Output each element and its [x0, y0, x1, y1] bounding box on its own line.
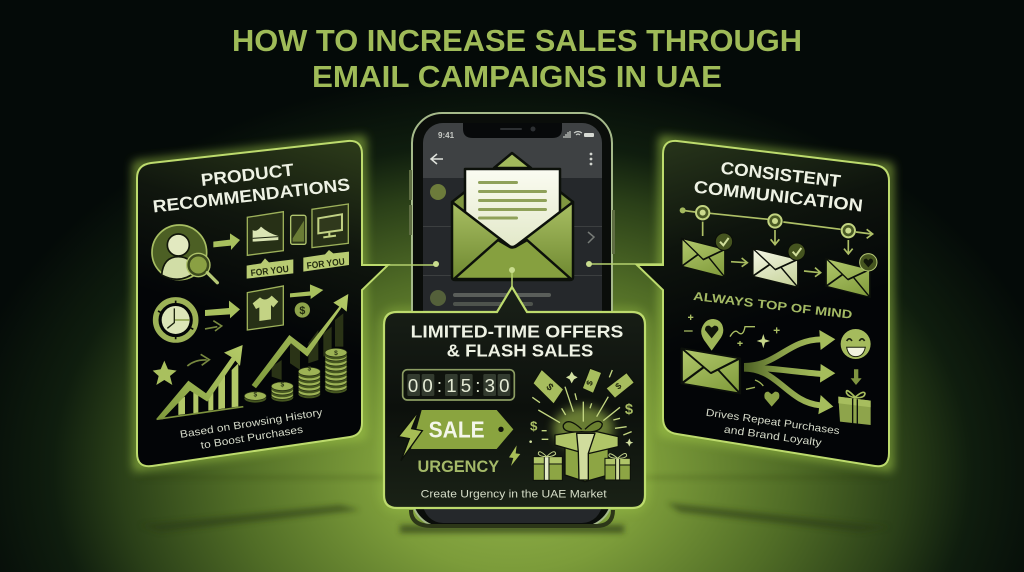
phone screen	[423, 123, 602, 523]
sparkles	[684, 315, 780, 348]
arrow	[290, 284, 323, 299]
caption: and Brand Loyalty	[723, 425, 823, 449]
product tile: monitor	[312, 204, 348, 248]
product tile: shoe	[247, 212, 283, 255]
product: phone	[291, 215, 306, 244]
heading: PRODUCT	[200, 159, 295, 190]
icon: dollar coin	[295, 302, 310, 318]
countdown timer	[403, 370, 514, 400]
icon: user with magnifier	[152, 225, 217, 283]
connectors	[362, 261, 663, 287]
timeline	[680, 206, 873, 254]
title: EMAIL CAMPAIGNS IN UAE	[312, 59, 722, 94]
icon: clock	[156, 300, 196, 340]
flow arrows	[744, 330, 835, 414]
tag: for you: FOR YOU	[306, 257, 345, 271]
envelope	[452, 153, 573, 280]
icon: gift	[838, 391, 871, 425]
caption	[705, 408, 840, 449]
icon: smiley	[841, 329, 871, 359]
caption	[179, 407, 324, 452]
gifts and money: $	[613, 381, 624, 391]
urgency label: URGENCY	[417, 457, 499, 476]
status bar: 9:41	[438, 131, 455, 140]
icon: large envelope	[682, 348, 740, 394]
gifts and money: $	[530, 419, 538, 434]
small gift	[533, 452, 562, 480]
arrow	[213, 233, 240, 250]
panel glows	[137, 140, 889, 508]
rising chart with coins: $	[280, 382, 284, 389]
phone	[409, 113, 615, 527]
phone body	[412, 113, 612, 527]
heading	[152, 159, 351, 217]
heading: COMMUNICATION	[693, 176, 864, 216]
arrow	[205, 321, 222, 331]
sale tag: SALE	[429, 416, 485, 442]
countdown timer: 00:15:30	[408, 375, 509, 396]
tag: for you: FOR YOU	[250, 264, 289, 278]
heading	[411, 322, 623, 360]
phone notch	[463, 123, 562, 138]
letter	[465, 169, 560, 248]
icon: envelope 3	[826, 254, 877, 297]
panel: consistent communication	[637, 141, 889, 466]
title	[232, 23, 802, 94]
caption: Based on Browsing History	[179, 407, 324, 441]
gifts and money	[529, 368, 634, 482]
heading: RECOMMENDATIONS	[152, 174, 351, 217]
sale tag	[398, 410, 513, 461]
heading	[693, 158, 864, 216]
icon: envelope 1	[682, 233, 733, 277]
rising chart with coins: $	[253, 391, 257, 398]
rising chart with coins: $	[334, 350, 338, 357]
panel: limited-time offers	[384, 287, 645, 508]
arrow	[187, 354, 209, 366]
heading: CONSISTENT	[720, 158, 842, 191]
title: HOW TO INCREASE SALES THROUGH	[232, 23, 802, 58]
icon: star	[153, 361, 177, 385]
panel: product recommendations	[137, 141, 388, 466]
gifts and money: $	[544, 382, 555, 394]
large gift	[555, 421, 618, 482]
menu dots	[590, 153, 592, 165]
icon: dollar coin: $	[299, 305, 305, 317]
rising chart with coins	[244, 294, 348, 403]
caption: to Boost Purchases	[200, 425, 304, 452]
rising chart	[156, 345, 243, 419]
small gift	[605, 453, 630, 480]
icon: heart pin	[701, 319, 723, 351]
arrow	[731, 258, 747, 267]
money bills	[533, 369, 564, 404]
tag: for you	[247, 258, 293, 279]
product tile: shirt	[247, 286, 283, 330]
caption: Drives Repeat Purchases	[705, 408, 840, 437]
rising chart with coins: $	[307, 366, 311, 373]
icon: envelope 2	[753, 243, 805, 287]
tag: for you	[303, 250, 349, 272]
dashes	[746, 380, 763, 389]
heading: & FLASH SALES	[447, 340, 593, 360]
heading: LIMITED-TIME OFFERS	[411, 322, 623, 342]
nav arrow	[431, 154, 443, 164]
arrow	[851, 369, 862, 385]
urgency label	[417, 445, 520, 476]
gifts and money: $	[584, 379, 595, 387]
subheading: ALWAYS TOP OF MIND	[693, 289, 853, 322]
gifts and money: $	[625, 402, 633, 418]
list items	[430, 184, 446, 200]
icon: heart	[764, 392, 779, 407]
arrow	[205, 301, 240, 318]
caption: Create Urgency in the UAE Market	[421, 489, 607, 501]
arrow	[804, 268, 821, 277]
phone bottom edge	[411, 510, 613, 526]
